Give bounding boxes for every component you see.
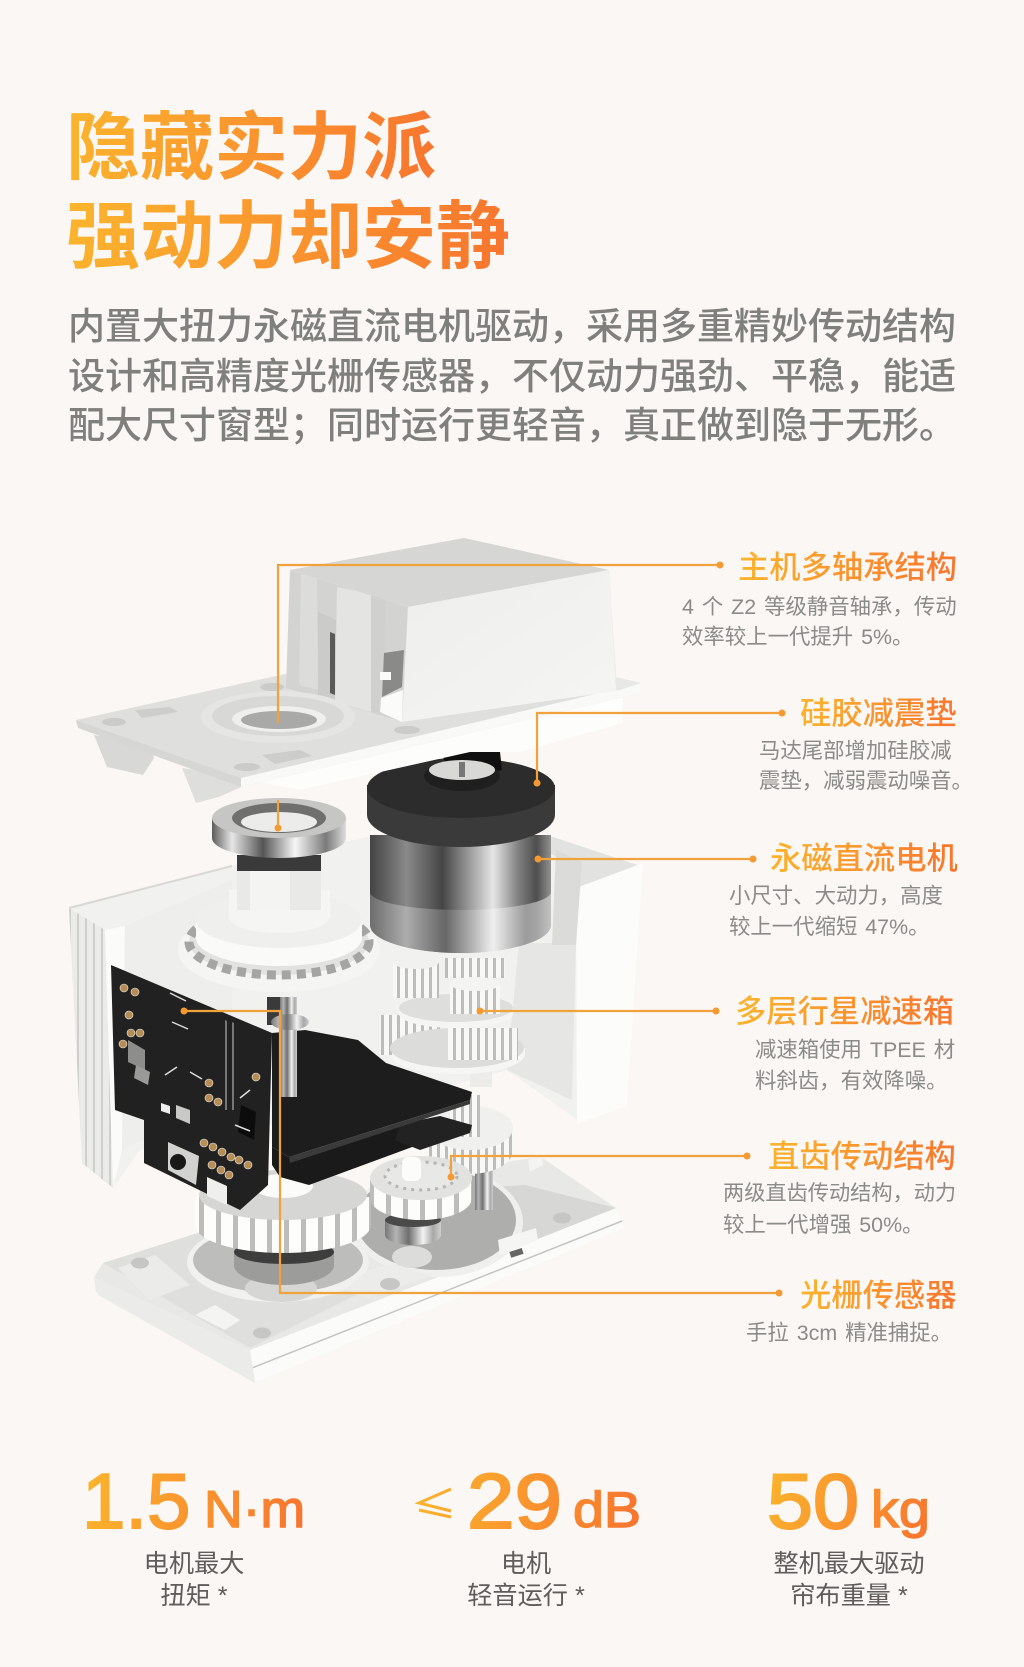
black gear plate [272, 1030, 472, 1185]
bearing [212, 798, 346, 871]
callout: 永磁直流电机: 较上一代缩短 47%。 [729, 915, 930, 939]
callout: 主机多轴承结构: 效率较上一代提升 5%。 [682, 625, 913, 649]
title line 1: 隐藏实力派 [66, 106, 436, 189]
heading: title [66, 106, 510, 278]
stat label [467, 1550, 585, 1610]
callout dots [180, 562, 786, 1296]
stat label: 扭矩 * [160, 1582, 228, 1610]
leader: bearing structure [278, 565, 720, 723]
leader: bearing lower segment [277, 800, 279, 828]
callout: 多层行星减速箱: 料斜齿，有效降噪。 [755, 1069, 948, 1093]
callout: 永磁直流电机: 小尺寸、大动力，高度 [729, 884, 943, 908]
intro paragraph: 配大尺寸窗型；同时运行更轻音，真正做到隐于无形。 [68, 405, 956, 446]
leader: motor [538, 858, 753, 860]
stat label [144, 1550, 244, 1610]
callout: 光栅传感器: 手拉 3cm 精准捕捉。 [746, 1321, 952, 1345]
callout: 多层行星减速箱: 多层行星减速箱 [735, 994, 954, 1029]
callout: 直齿传动结构: 直齿传动结构 [768, 1139, 956, 1174]
motor [367, 752, 555, 953]
callout: 直齿传动结构: 较上一代增强 50%。 [723, 1213, 924, 1237]
planetary gearbox [380, 955, 525, 1087]
callout: 硅胶减震垫 [759, 696, 973, 793]
callout: 主机多轴承结构 [682, 550, 957, 649]
callout: 多层行星减速箱 [735, 994, 955, 1093]
intro paragraph: 设计和高精度光栅传感器，不仅动力强劲、平稳，能适 [68, 356, 956, 396]
title line 2: 强动力却安静 [66, 195, 510, 278]
callout: 硅胶减震垫: 硅胶减震垫 [800, 696, 956, 731]
stat label: 轻音运行 * [467, 1582, 585, 1610]
callout: 硅胶减震垫: 震垫，减弱震动噪音。 [759, 769, 973, 793]
callout: 主机多轴承结构: 4 个 Z2 等级静音轴承，传动 [682, 595, 957, 619]
callout: 光栅传感器 [746, 1278, 956, 1345]
intro paragraph [68, 306, 956, 446]
callout: 直齿传动结构 [723, 1139, 956, 1237]
stat label: 电机 [501, 1550, 551, 1578]
stat label [773, 1550, 925, 1610]
middle spur gear [370, 1156, 472, 1220]
circuit board [111, 965, 272, 1210]
callout lines and dots [184, 565, 782, 1293]
leader: silicone pad [537, 713, 782, 783]
lower bearings [234, 1170, 493, 1302]
callout: 永磁直流电机 [729, 841, 958, 939]
callout: 主机多轴承结构: 主机多轴承结构 [738, 550, 957, 585]
callout: 多层行星减速箱: 减速箱使用 TPEE 材 [755, 1038, 955, 1062]
callout: 直齿传动结构: 两级直齿传动结构，动力 [723, 1182, 956, 1205]
callout: 永磁直流电机: 永磁直流电机 [770, 841, 958, 876]
top plate and motor box [76, 538, 641, 803]
stat: ≤ 29 dB [414, 1465, 641, 1610]
leader: planetary gearbox [480, 1010, 716, 1012]
lower housing shell [69, 830, 643, 1188]
stat label: 电机最大 [144, 1550, 244, 1578]
stat label: 帘布重量 * [790, 1582, 908, 1610]
rear spur gear [427, 1095, 513, 1174]
stat label: 整机最大驱动 [773, 1550, 925, 1578]
callout: 硅胶减震垫: 马达尾部增加硅胶减 [759, 739, 952, 763]
stat: 50 kg [767, 1465, 930, 1610]
callout: 光栅传感器: 光栅传感器 [800, 1278, 956, 1313]
intro paragraph: 内置大扭力永磁直流电机驱动，采用多重精妙传动结构 [68, 306, 956, 347]
leader: spur gears [451, 1156, 747, 1177]
stat: 50 kg: kg [871, 1481, 930, 1539]
base plate [94, 1155, 625, 1383]
output shaft and disc [178, 860, 380, 1097]
stat: 1.5 N·m [82, 1465, 305, 1610]
leader: grating sensor [184, 1011, 779, 1293]
big spur gear [195, 1170, 371, 1253]
